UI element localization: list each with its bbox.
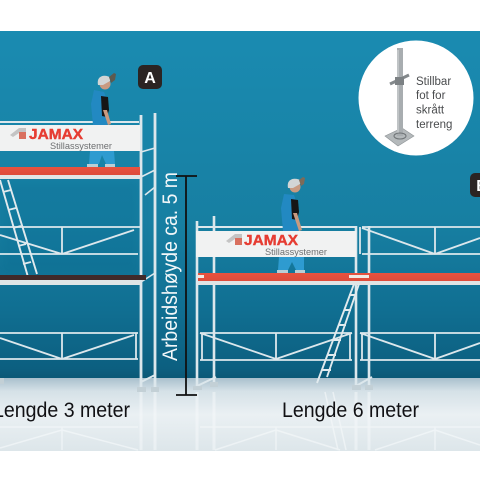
scaffold B ladder: [317, 284, 359, 383]
floor reflections: [0, 392, 480, 450]
tagline A: Stillassystemer: [50, 141, 112, 151]
scaffold A frame: [0, 113, 155, 391]
banner B: [196, 231, 356, 257]
background wall: [0, 31, 480, 379]
worker A shirt: [101, 96, 109, 117]
worker B boots: [277, 270, 305, 273]
height dimension line: [176, 176, 197, 395]
scaffold B feet: [193, 382, 373, 390]
badge A: [138, 65, 162, 89]
callout text: skrått: [416, 104, 445, 116]
height label: Arbeidshøyde ca. 5 m: [159, 172, 182, 361]
worker B torso: [281, 194, 299, 231]
scaffold A feet: [0, 378, 159, 392]
scaffold B frame: [197, 216, 480, 388]
worker B cap: [288, 179, 302, 188]
scaffold A shadow: [0, 180, 140, 275]
scaffold B deck: [198, 273, 480, 285]
worker A cap: [98, 76, 111, 85]
jack base plate: [385, 128, 414, 146]
worker A boots: [87, 164, 115, 167]
tagline B: Stillassystemer: [265, 247, 327, 257]
logo wordmark B: JAMAX: [244, 232, 298, 249]
callout text: terreng: [416, 119, 452, 131]
worker A arm: [103, 110, 111, 125]
scaffold A upper deck: [0, 167, 140, 179]
jack handle: [390, 75, 409, 84]
worker A: [87, 73, 116, 167]
worker B arm: [293, 213, 302, 231]
scaffold A lower deck: [0, 275, 146, 285]
icon: adjustable jack: [385, 48, 414, 146]
worker B: [277, 177, 305, 273]
callout text: fot for: [416, 90, 446, 102]
worker A torso: [91, 90, 108, 125]
worker B head: [290, 182, 300, 192]
scaffold B: 6 meter: [193, 216, 480, 390]
scaffold A: 3 meter: [0, 113, 159, 392]
banner A: [0, 125, 140, 151]
badge A: A: [144, 70, 156, 87]
floor: [0, 378, 480, 451]
callout text: Stillbar: [416, 76, 451, 88]
logo house A: [10, 128, 26, 139]
worker B shirt: [291, 199, 299, 220]
worker A legs: [89, 151, 115, 164]
worker B legs: [278, 257, 304, 270]
length label 6 meter: Lengde 6 meter: [282, 399, 419, 422]
callout circle: [358, 40, 474, 156]
worker B hand: [299, 177, 305, 186]
scaffold A ladder: [0, 180, 37, 277]
jack bolt ring: [394, 133, 406, 139]
callout: adjustable foot: [358, 40, 474, 156]
worker A hand: [109, 73, 116, 83]
worker A head: [100, 78, 110, 90]
badge B: [470, 173, 480, 197]
jack threaded rod: [397, 48, 403, 136]
logo wordmark A: JAMAX: [29, 126, 83, 143]
logo house B: [226, 234, 242, 245]
